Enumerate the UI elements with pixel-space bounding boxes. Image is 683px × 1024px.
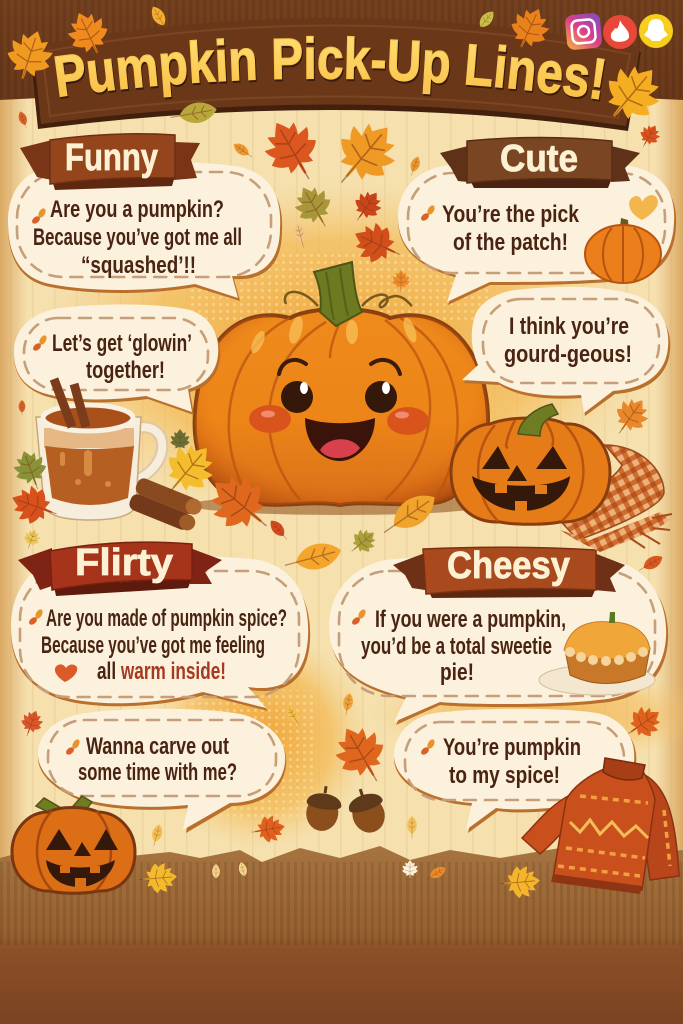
bubble: pumpkin to my spice — [394, 709, 636, 833]
grooves — [37, 811, 111, 890]
bubble: cheesy 1 — [329, 556, 668, 725]
face: brows — [279, 360, 400, 374]
leaf — [636, 552, 665, 575]
amber upper — [44, 428, 134, 448]
mug of cider — [36, 379, 162, 520]
mark — [32, 334, 48, 352]
text: Because you’ve got me feeling — [41, 632, 265, 659]
leaf — [254, 110, 331, 192]
text — [443, 734, 581, 789]
body — [12, 808, 135, 893]
leaf — [502, 1, 556, 59]
leaf — [326, 717, 397, 793]
text — [361, 606, 566, 686]
stem — [609, 612, 615, 623]
pumpkin highlights — [248, 315, 419, 355]
banner: flirty — [18, 542, 222, 596]
leaf — [21, 527, 43, 551]
sweater — [522, 758, 679, 894]
scarf — [552, 445, 672, 552]
background: parchment — [0, 90, 683, 870]
collar — [603, 758, 645, 780]
text: Are you a pumpkin? — [50, 196, 224, 223]
text: Let’s get ‘glowin’ — [52, 330, 192, 357]
halftone texture lower — [190, 690, 315, 820]
pumpkin shadow — [190, 495, 490, 515]
text: Are you made of pumpkin spice? — [46, 605, 287, 632]
leaf — [282, 538, 344, 577]
face: left eye — [281, 381, 313, 413]
leaf — [170, 429, 190, 454]
icon: heart — [55, 664, 77, 682]
tea highlights — [60, 450, 111, 487]
text: to my spice! — [449, 762, 560, 789]
text — [52, 330, 192, 384]
pie — [539, 612, 655, 695]
face: cheeks — [249, 405, 429, 435]
left sleeve — [522, 795, 574, 854]
leaf — [19, 400, 25, 416]
bubble: flirty 1 — [11, 556, 310, 711]
hem — [551, 874, 642, 894]
bubble: wanna carve — [38, 709, 286, 833]
body — [553, 768, 655, 890]
cinnamon bundle — [127, 476, 204, 534]
leaf — [320, 109, 409, 200]
leaf — [249, 813, 287, 845]
icon: heart — [629, 195, 658, 220]
bubble: gourd-geous — [462, 287, 670, 416]
eyes and nose — [482, 446, 567, 481]
teeth — [495, 484, 547, 511]
mark — [31, 207, 47, 225]
title text: Pumpkin Pick-Up Lines! — [54, 36, 606, 102]
leaf — [284, 704, 303, 728]
leaf — [148, 4, 171, 33]
acorns — [303, 784, 391, 837]
bands — [558, 796, 670, 876]
text: Wanna carve out — [86, 733, 229, 760]
stem ridges — [326, 268, 348, 320]
crust — [565, 648, 650, 684]
text — [41, 605, 287, 685]
zigzag — [570, 820, 648, 838]
social icons — [565, 12, 673, 50]
mouth — [472, 476, 570, 511]
mark — [65, 738, 81, 756]
text: of the patch! — [453, 229, 568, 256]
face: mouth — [305, 418, 375, 461]
text: Because you’ve got me all — [33, 224, 242, 251]
mouth — [46, 860, 115, 887]
tendrils — [285, 292, 412, 307]
leaf — [473, 8, 497, 34]
leaf — [347, 185, 387, 228]
text: pie! — [440, 659, 474, 686]
text — [33, 196, 242, 279]
label: Funny — [65, 137, 158, 179]
label: Cheesy — [447, 545, 570, 587]
leaf — [402, 860, 418, 880]
stem — [36, 796, 92, 820]
title board — [32, 18, 641, 131]
bubble: funny 1 — [8, 161, 282, 301]
halftone texture — [190, 250, 490, 320]
eyes and nose — [46, 829, 118, 856]
leaf — [619, 700, 668, 746]
banner: cheesy — [393, 545, 625, 598]
body — [585, 225, 661, 283]
leaf — [407, 816, 417, 838]
text: some time with me? — [78, 759, 237, 786]
icon: flame app — [603, 15, 637, 49]
text: If you were a pumpkin, — [375, 606, 566, 633]
leaf — [635, 121, 664, 152]
leaf — [407, 155, 422, 177]
text: “squashed’!! — [81, 252, 196, 279]
leaf — [288, 179, 341, 235]
right sleeve — [640, 775, 679, 880]
background texture — [0, 90, 683, 870]
leaf — [0, 24, 59, 91]
text: all warm inside! — [97, 658, 226, 685]
face: right eye — [365, 381, 397, 413]
leaf — [6, 480, 63, 531]
wood header strip — [0, 0, 683, 103]
leaf — [344, 524, 381, 560]
text: You’re the pick — [442, 201, 580, 228]
leaf — [152, 433, 224, 507]
leaf — [198, 462, 283, 546]
leaf — [267, 517, 291, 543]
leaf — [589, 53, 673, 138]
leaf — [17, 707, 46, 740]
leaf — [376, 486, 442, 543]
leaf — [292, 222, 309, 249]
leaves around mug — [6, 429, 442, 546]
text: together! — [86, 357, 165, 384]
glass — [36, 417, 141, 520]
stem — [619, 218, 629, 236]
rim — [43, 405, 133, 431]
stem — [518, 404, 558, 436]
mark — [28, 608, 44, 626]
mark — [420, 204, 436, 222]
leaf — [341, 692, 354, 716]
handle — [130, 427, 162, 482]
text — [504, 313, 632, 368]
leaf — [498, 865, 541, 900]
pumpkin grooves — [229, 318, 458, 500]
teeth — [60, 866, 100, 887]
background glow: lower panel — [150, 630, 370, 850]
mark — [351, 608, 367, 626]
leaf — [231, 140, 255, 161]
mark — [420, 738, 436, 756]
jack-o-lantern right — [451, 404, 672, 552]
acorn left — [303, 784, 344, 833]
text — [442, 201, 580, 256]
acorn right — [344, 784, 391, 837]
leaf — [149, 823, 164, 847]
banner: cute — [440, 138, 640, 188]
leaf — [9, 446, 53, 494]
icon: instagram — [565, 12, 603, 50]
leaf — [606, 391, 655, 442]
background glow: lower right — [370, 665, 683, 765]
leaf — [424, 864, 448, 883]
leaf — [392, 270, 410, 292]
top — [564, 622, 650, 659]
wood footer strip — [0, 846, 683, 1024]
background glow: centre — [30, 180, 650, 520]
banner: funny — [20, 134, 200, 190]
label: Flirty — [75, 542, 173, 584]
leaf — [138, 862, 178, 895]
sticks — [54, 379, 86, 427]
tea — [45, 446, 134, 505]
leaf — [212, 864, 220, 882]
leaf — [61, 5, 117, 66]
pumpkin edge shading — [195, 309, 488, 505]
leaf — [237, 861, 249, 881]
jack-o-lantern bottom left — [12, 796, 135, 893]
grooves — [603, 226, 643, 282]
plate — [539, 665, 655, 695]
text: I think you’re — [509, 313, 629, 340]
label: Cute — [500, 138, 578, 180]
bubble: funny 2 — [14, 304, 220, 415]
text: You’re pumpkin — [443, 734, 581, 761]
handle inner — [130, 427, 162, 482]
icon: snapchat — [639, 14, 673, 48]
body — [451, 418, 610, 524]
grooves — [478, 420, 583, 521]
leaf — [169, 99, 218, 127]
leaf — [347, 216, 408, 272]
scallops — [565, 647, 648, 666]
leaf — [17, 110, 30, 130]
text — [78, 733, 237, 786]
pumpkin stem — [314, 262, 362, 326]
small pumpkin — [585, 218, 661, 283]
pumpkin body — [195, 309, 488, 505]
main pumpkin — [190, 262, 490, 515]
text: you’d be a total sweetie — [361, 633, 552, 660]
bubble: cute 1 — [398, 161, 676, 305]
text: gourd-geous! — [504, 341, 632, 368]
